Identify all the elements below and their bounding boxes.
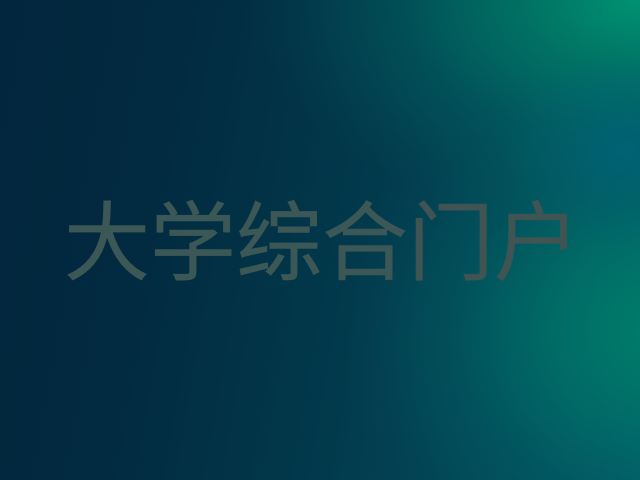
title: 大学综合门户 xyxy=(64,196,580,292)
